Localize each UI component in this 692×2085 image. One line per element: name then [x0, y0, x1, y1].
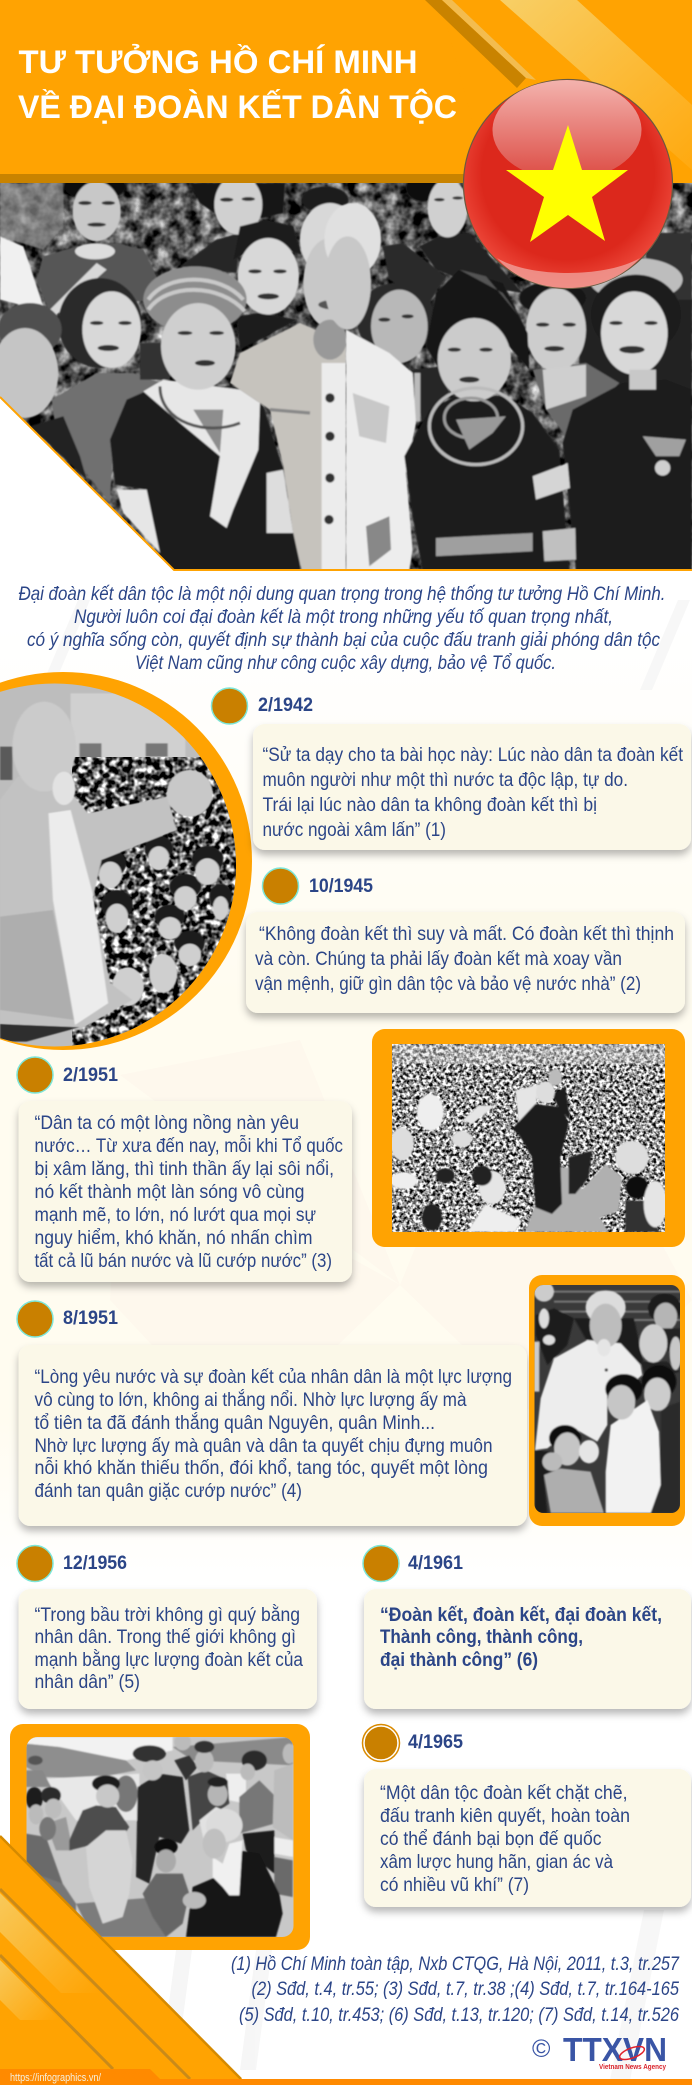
10/1945 marker: 10/1945: [309, 876, 373, 897]
quote card 2/1951: tất cả lũ bán nước và lũ cướp nước” (3): [34, 1251, 332, 1272]
quote card 8/1951: nỗi khó khăn thiếu thốn, đói khổ, tang tóc, quyết một lòng: [34, 1457, 488, 1479]
quote card 2/1951: “Dân ta có một lòng nồng nàn yêu: [34, 1113, 299, 1134]
circular photo: Ho Chi Minh greeting crowd: [0, 672, 252, 1050]
quote card 4/1965: đấu tranh kiên quyết, hoàn toàn: [380, 1806, 630, 1827]
12/1956 marker: 12/1956: [63, 1553, 127, 1574]
photo frame: Ho Chi Minh with children: [529, 1275, 685, 1526]
2/1951 marker: [17, 1057, 118, 1093]
title: [18, 44, 457, 125]
quote card 4/1965: “Một dân tộc đoàn kết chặt chẽ,: [380, 1783, 628, 1804]
quote card 12/1956: [18, 1589, 317, 1709]
photo left half: [0, 172, 360, 571]
quote card 2/1942: muôn người như một thì nước ta độc lập, tự do.: [262, 770, 628, 791]
TTXVN logo: TTXVN: [563, 2031, 667, 2068]
10/1945 marker: [262, 868, 373, 904]
quote card 2/1951: [18, 1101, 352, 1282]
photo frame: Ho Chi Minh among crowd: [372, 1029, 685, 1247]
quote card 8/1951: đánh tan quân giặc cướp nước” (4): [34, 1481, 302, 1502]
photo right half: [324, 175, 692, 571]
4/1965 marker: [362, 1724, 463, 1762]
bottom-left decorative stripes: [0, 1836, 243, 2080]
4/1965 marker: 4/1965: [408, 1732, 463, 1753]
2/1942 marker: 2/1942: [258, 695, 313, 716]
quote card 4/1961: Thành công, thành công,: [380, 1627, 583, 1648]
title: VỀ ĐẠI ĐOÀN KẾT DÂN TỘC: [18, 89, 457, 125]
photo frame: Ho Chi Minh with farmers: [10, 1724, 310, 1950]
quote card 2/1951: nước… Từ xưa đến nay, mỗi khi Tổ quốc: [34, 1135, 343, 1157]
quote card 4/1965: [364, 1769, 691, 1907]
quote card 10/1945: và còn. Chúng ta phải lấy đoàn kết mà xoay vần: [255, 949, 622, 970]
2/1951 marker: 2/1951: [63, 1065, 118, 1086]
quote card 10/1945: vận mệnh, giữ gìn dân tộc và bảo vệ nước nhà” (2): [255, 974, 641, 995]
quote card 8/1951: [18, 1345, 527, 1526]
quote card 12/1956: “Trong bầu trời không gì quý bằng: [34, 1604, 300, 1626]
quote card 4/1965: có nhiều vũ khí” (7): [380, 1875, 529, 1896]
footer bar and source url: [0, 2069, 692, 2085]
quote card 4/1965: có thể đánh bại bọn đế quốc: [380, 1829, 602, 1850]
quote card 2/1942: nước ngoài xâm lấn” (1): [262, 820, 446, 841]
title: TƯ TƯỞNG HỒ CHÍ MINH: [18, 44, 418, 80]
quote card 8/1951: tổ tiên ta đã đánh thắng quân Nguyên, quân Minh...: [34, 1412, 435, 1434]
quote card 8/1951: “Lòng yêu nước và sự đoàn kết của nhân dân là một lực lượng: [34, 1367, 512, 1388]
footer bar and source url: https://infographics.vn/: [10, 2072, 102, 2084]
flag emblem of Vietnam: [464, 80, 672, 288]
quote card 12/1956: nhân dân” (5): [34, 1672, 140, 1693]
photo cut corner line: [0, 397, 692, 570]
quote card 4/1965: xâm lược hung hãn, gian ác và: [380, 1852, 613, 1873]
quote card 4/1961: [364, 1589, 691, 1709]
quote card 4/1961: “Đoàn kết, đoàn kết, đại đoàn kết,: [380, 1605, 662, 1626]
TTXVN logo: Vietnam News Agency: [599, 2062, 667, 2071]
12/1956 marker: [17, 1546, 127, 1582]
4/1961 marker: [363, 1546, 463, 1582]
8/1951 marker: 8/1951: [63, 1308, 118, 1329]
4/1961 marker: 4/1961: [408, 1553, 463, 1574]
intro text: Người luôn coi đại đoàn kết là một trong những yếu tố quan trọng nhất,: [74, 607, 613, 628]
8/1951 marker: [17, 1301, 118, 1337]
quote card 2/1951: bị xâm lăng, thì tinh thần ấy lại sôi nổi,: [34, 1159, 334, 1180]
quote card 10/1945: [246, 912, 685, 1013]
quote card 4/1961: đại thành công” (6): [380, 1650, 538, 1671]
quote card 8/1951: vô cùng to lớn, không ai thắng nổi. Nhờ lực lượng ấy mà: [34, 1389, 467, 1411]
TTXVN logo: [532, 2031, 667, 2071]
quote card 2/1951: nó kết thành một làn sóng vô cùng: [34, 1182, 304, 1203]
quote card 12/1956: nhân dân. Trong thế giới không gì: [34, 1627, 296, 1648]
quote card 2/1942: [253, 724, 691, 850]
quote card 12/1956: mạnh bằng lực lượng đoàn kết của: [34, 1649, 303, 1671]
quote card 8/1951: Nhờ lực lượng ấy mà quân và dân ta quyết chịu đựng muôn: [34, 1436, 492, 1457]
icon: yellow star: [506, 125, 628, 242]
2/1942 marker: [212, 688, 313, 724]
TTXVN logo: ©: [532, 2035, 551, 2063]
footnotes: [231, 1954, 680, 2026]
main photo: Ho Chi Minh with ethnic minority women: [0, 172, 692, 571]
quote card 2/1951: mạnh mẽ, to lớn, nó lướt qua mọi sự: [34, 1205, 316, 1226]
quote card 2/1951: nguy hiểm, khó khăn, nó nhấn chìm: [34, 1228, 312, 1249]
intro text: [18, 584, 666, 674]
quote card 2/1942: Trái lại lúc nào dân ta không đoàn kết thì bị: [262, 795, 597, 816]
intro text: Việt Nam cũng như công cuộc xây dựng, bảo vệ Tổ quốc.: [135, 653, 556, 674]
header banner: [0, 0, 692, 249]
